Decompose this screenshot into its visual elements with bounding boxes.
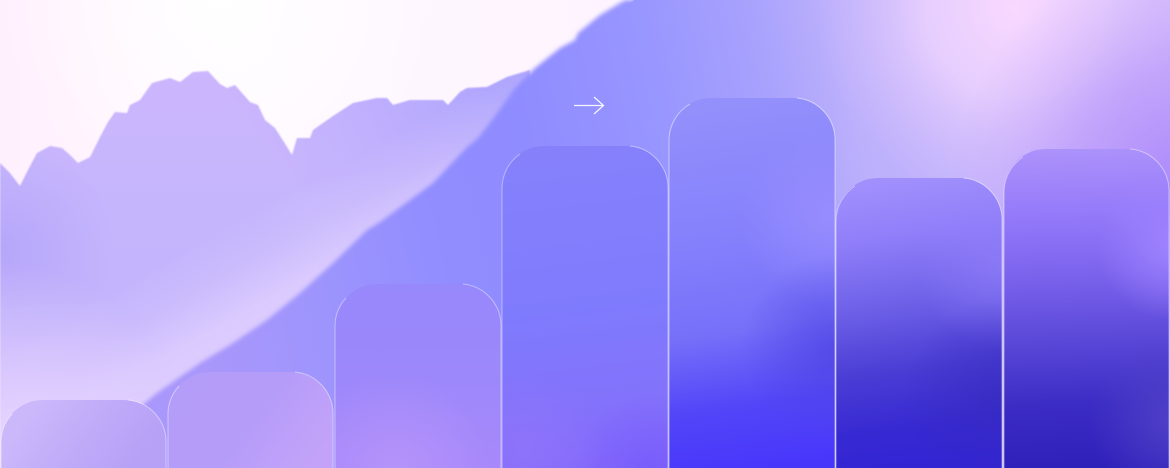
back mountain range xyxy=(0,70,530,468)
pink glow top right xyxy=(700,0,1170,320)
icon: arrow xyxy=(574,97,604,114)
violet glow right edge xyxy=(900,0,1170,430)
bar 5 xyxy=(669,98,835,468)
bar 4 xyxy=(502,146,668,468)
light streak on lower slope xyxy=(0,70,530,468)
bar 6 xyxy=(836,178,1002,468)
bar 2 xyxy=(168,372,333,468)
bar 1 xyxy=(1,400,166,468)
bar 7 xyxy=(1004,149,1169,468)
bar 3 xyxy=(335,284,501,468)
